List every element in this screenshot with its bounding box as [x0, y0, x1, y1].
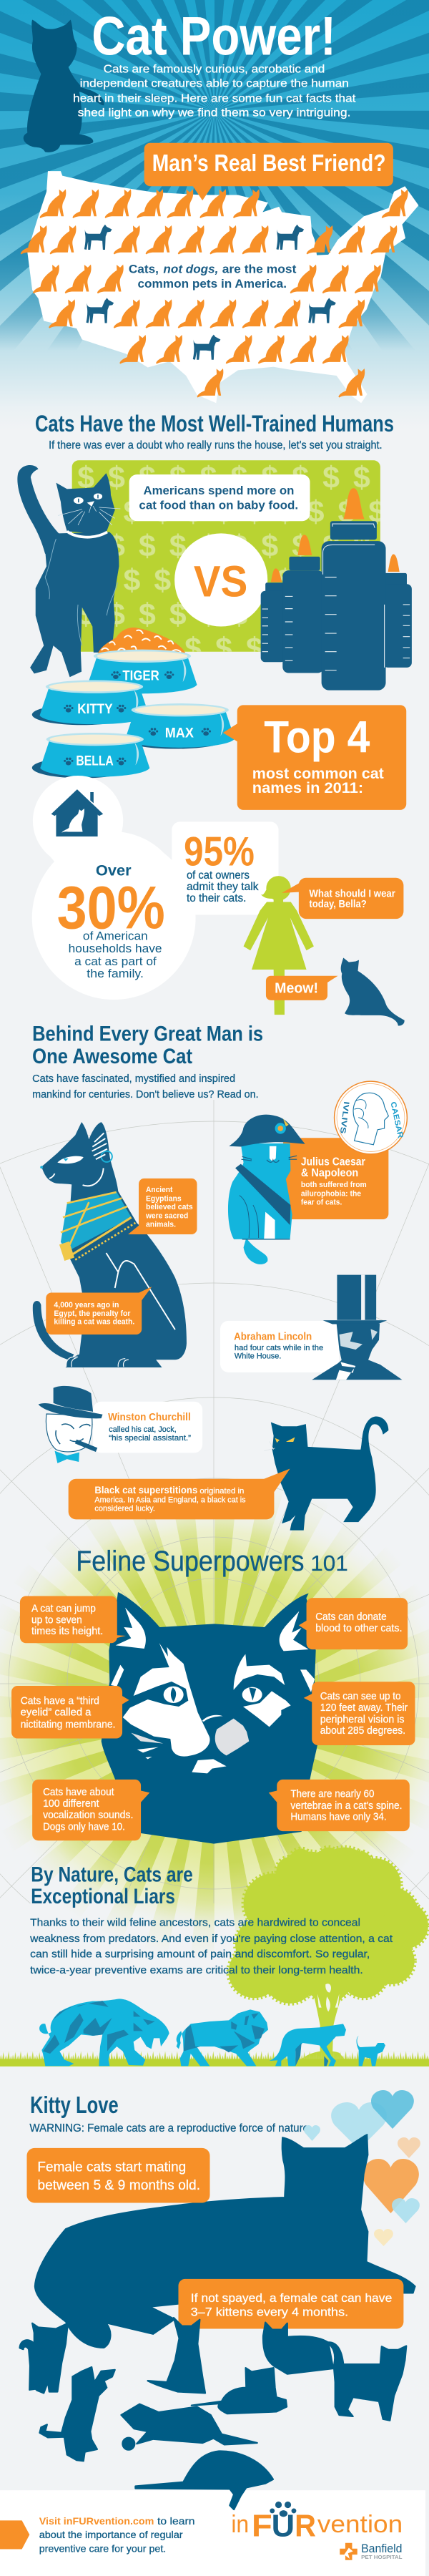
illustration: small house cat	[357, 2036, 385, 2066]
logo: inFURvention: vention	[317, 2511, 403, 2538]
detail: Egyptian cat paws	[66, 1357, 129, 1367]
callout: Abraham Lincoln: had four cats while in the	[235, 1344, 323, 1352]
illustration: saber-toothed cat	[39, 1999, 169, 2066]
callout: black cat superstitions	[69, 1469, 290, 1519]
callout: Winston Churchill	[93, 1402, 202, 1453]
icon: orange heart	[363, 2159, 419, 2213]
callout: 100 vocalization sounds: Cats have about	[43, 1787, 114, 1798]
illustration: baby bottles	[261, 488, 412, 691]
heading: great men	[32, 1022, 263, 1068]
callout: third eyelid: Cats have a “third	[21, 1696, 99, 1707]
map of the USA	[27, 171, 418, 403]
stat: 95 percent caption: admit they talk	[187, 881, 259, 893]
callout: 100 vocalization sounds: 100 different	[43, 1798, 99, 1810]
text: exceptional liars paragraph: Thanks to their wild feline ancestors, cats are hardwired to conceal	[30, 1917, 360, 1929]
bowl: tiger: TIGER	[122, 669, 159, 684]
VS badge	[174, 533, 267, 627]
callout: 4,000 years ago: Egypt, the penalty for	[54, 1309, 131, 1318]
illustration: lion	[177, 2009, 268, 2066]
grass strip	[0, 2051, 429, 2067]
stat: over 30 percent: Over	[96, 862, 132, 879]
callout: Winston Churchill: Winston Churchill	[108, 1412, 191, 1423]
heading: great men: Behind Every Great Man is	[32, 1022, 263, 1045]
callout: third eyelid: nictitating membrane.	[21, 1719, 115, 1731]
bowl: max: MAX	[165, 726, 194, 741]
callout: start mating: Female cats start mating	[37, 2160, 186, 2175]
stat: 95 percent caption	[187, 869, 259, 904]
SECTION: big cat ancestors	[39, 1999, 385, 2066]
callout: Julius Caesar and Napoleon	[283, 1138, 388, 1219]
icon: yellow heart	[374, 2229, 393, 2246]
blue sunburst header background	[0, 0, 429, 429]
callout: black cat superstitions: considered lucky.	[94, 1504, 155, 1513]
illustration: Napoleon cat	[228, 1115, 305, 1264]
pet icons grid: cats and dogs	[21, 189, 408, 398]
callout: what should I wear: today, Bella?	[309, 899, 367, 910]
arrow: footer marker	[0, 2520, 29, 2549]
text: footer call to action: about the importance of regular	[39, 2529, 183, 2540]
stat: 95 percent caption: of cat owners	[187, 869, 250, 882]
callout: top 4 cat names	[223, 705, 406, 810]
logo: Banfield Pet Hospital: PET HOSPITAL	[361, 2554, 403, 2560]
text: exceptional liars paragraph	[29, 1917, 393, 1976]
text: footer call to action: to learn	[157, 2516, 194, 2527]
callout: jump seven times	[20, 1596, 126, 1643]
icon: small light blue heart	[304, 2125, 320, 2141]
callout: 60 vertebrae	[269, 1780, 410, 1831]
callout: 4,000 years ago	[46, 1287, 152, 1335]
callout: 95 percent background	[172, 821, 279, 914]
callout: Abraham Lincoln: White House.	[235, 1352, 281, 1361]
callout: 60 vertebrae: There are nearly 60	[290, 1789, 374, 1800]
logo: inFURvention	[231, 2502, 403, 2544]
logo: Banfield Pet Hospital: Banfield	[361, 2542, 402, 2555]
icon: house with cat	[51, 789, 103, 836]
map caption: common pets in America.	[137, 277, 287, 291]
stat: over 30 percent	[57, 862, 165, 980]
callout: start mating	[26, 2148, 209, 2202]
VS badge: VS	[194, 557, 247, 605]
illustration: cheetah	[270, 2024, 346, 2066]
callout: Winston Churchill: “his special assistant.”	[109, 1434, 191, 1443]
bowl: kitty: KITTY	[77, 702, 113, 717]
stat: over 30 percent: households have	[69, 942, 162, 955]
stat: over 30 percent: a cat as part of	[74, 955, 157, 968]
callout: see 120 feet: about 285 degrees.	[320, 1725, 405, 1737]
callout: Julius Caesar and Napoleon: & Napoleon	[301, 1167, 358, 1179]
heading: kitty love: Kitty Love	[30, 2092, 119, 2118]
callout: ancient Egyptians: Egyptians	[146, 1194, 182, 1203]
stat: 95 percent: 95%	[184, 829, 255, 875]
callout: Julius Caesar and Napoleon: Julius Caesar	[301, 1156, 365, 1169]
bowl: max	[125, 703, 235, 749]
SECTION: great men continued and superpowers	[39, 1275, 402, 1577]
stat: over 30 percent: the family.	[87, 967, 144, 980]
illustration: Egyptian cat	[33, 1122, 187, 1367]
text: exceptional liars paragraph: twice-a-year preventive exams are critical to their long-term health.	[30, 1964, 363, 1976]
text: great men intro: Cats have fascinated, mystified and inspired	[32, 1073, 235, 1085]
intro paragraph: shed light on why we find them so very intriguing.	[78, 107, 351, 119]
text: footer call to action	[39, 2516, 194, 2554]
text: footer call to action: preventive care for your pet.	[39, 2543, 166, 2554]
callout: cat food vs baby food	[129, 474, 310, 521]
callout: cat food vs baby food: Americans spend more on	[144, 484, 294, 497]
callout: black cat superstitions: originated in	[199, 1487, 244, 1496]
text: great men intro	[32, 1073, 259, 1101]
illustration: cat food pile	[98, 628, 186, 659]
callout: what should I wear	[282, 878, 403, 919]
subheading: If there was ever a doubt who really runs the house, let's set you straight.	[49, 439, 383, 452]
icon: sitting cat	[341, 958, 405, 1026]
callout: black cat superstitions: America. In Asia and England, a black cat is	[94, 1496, 246, 1505]
icon: light blue large heart	[331, 2102, 387, 2150]
polar grid and glow background for history and superpowers	[0, 1100, 429, 1949]
SECTION: superpower callouts	[11, 1596, 415, 1745]
bowl: bella	[32, 733, 149, 778]
icon: blue heart	[371, 2090, 414, 2129]
callout: jump seven times: A cat can jump	[31, 1603, 96, 1614]
SECTION: header and map	[21, 6, 418, 436]
callout: cat food vs baby food: cat food than on baby food.	[139, 499, 298, 512]
callout: see 120 feet: 120 feet away. Their	[320, 1702, 408, 1714]
callout: see 120 feet: Cats can see up to	[320, 1691, 401, 1702]
illustration: kittens	[20, 2318, 406, 2509]
logo: inFURvention: in	[231, 2511, 249, 2538]
callout: kittens every 4 months	[178, 2279, 403, 2328]
callout: Abraham Lincoln: Abraham Lincoln	[234, 1332, 312, 1343]
stat: over 30 percent: of American	[83, 930, 148, 943]
callout: 4,000 years ago: killing a cat was death.	[54, 1318, 134, 1327]
icon: peach heart	[398, 2137, 420, 2158]
icon: Caesar coin: CAESAR	[388, 1101, 405, 1139]
callout: third eyelid: eyelid” called a	[21, 1707, 92, 1719]
callout: start mating: between 5 & 9 months old.	[37, 2178, 200, 2193]
callout: ancient Egyptians: animals.	[146, 1220, 176, 1229]
icon: small blue heart	[392, 2198, 420, 2223]
callout: top 4 cat names: names in 2011:	[252, 779, 363, 796]
icon: Caesar coin: IVLIVS	[338, 1101, 350, 1134]
heading: exceptional liars	[31, 1863, 193, 1908]
callout: ancient Egyptians	[128, 1179, 197, 1234]
callout: donate blood	[299, 1598, 408, 1649]
callout: 100 vocalization sounds: Dogs only have 10.	[43, 1821, 125, 1833]
text: great men intro: mankind for centuries. Don't believe us? Read on.	[32, 1089, 259, 1101]
heading: feline superpowers: 101	[310, 1551, 348, 1576]
callout: top 4 cat names: Top 4	[264, 713, 370, 763]
stat: 95 percent caption: to their cats.	[187, 892, 246, 904]
callout: donate blood: blood to other cats.	[315, 1623, 402, 1634]
stat: over 30 percent: 30%	[57, 874, 165, 942]
illustration: woman figure	[244, 876, 314, 1015]
title: Cat Power!	[92, 6, 336, 67]
map caption: are the most	[222, 263, 297, 276]
callout: donate blood: Cats can donate	[315, 1611, 387, 1623]
text: exceptional liars paragraph: can still hide a surprising amount of pain and discomfort. So regular,	[30, 1948, 370, 1961]
icon: sitting cat silhouette	[24, 20, 104, 152]
illustration: tree	[229, 1848, 428, 2063]
callout: jump seven times: up to seven	[31, 1614, 82, 1626]
callout: Julius Caesar and Napoleon: fear of cats.	[301, 1198, 342, 1206]
illustration: standing cat	[17, 465, 120, 677]
illustration: black cat	[264, 1417, 388, 1531]
SECTION: well-trained humans	[17, 439, 412, 1000]
SECTION: exceptional liars	[0, 1780, 429, 2135]
text: exceptional liars paragraph: weakness from predators. And even if you're paying close attention, a cat	[29, 1933, 393, 1945]
SECTION: kitty love and footer	[0, 2135, 425, 2576]
callout: man's real best friend	[144, 143, 393, 200]
text: footer call to action: Visit inFURvention.com	[39, 2516, 154, 2527]
logo: Banfield Pet Hospital	[340, 2542, 403, 2560]
callout: 60 vertebrae: vertebrae in a cat's spine.	[290, 1800, 402, 1812]
callout: Abraham Lincoln	[220, 1321, 339, 1372]
panel: 30 percent circle background	[32, 776, 196, 1000]
callout: Julius Caesar and Napoleon: both suffered from	[301, 1181, 367, 1189]
panel: footer background	[0, 2490, 425, 2576]
callout: man's real best friend: Man’s Real Best Friend?	[152, 150, 386, 177]
bowl: bella: BELLA	[76, 754, 114, 769]
logo: inFURvention: F	[252, 2509, 272, 2544]
callout: third eyelid	[11, 1686, 129, 1738]
callout: 60 vertebrae: Humans have only 34.	[290, 1811, 387, 1823]
illustration: cat face	[102, 1592, 318, 1844]
intro paragraph: Cats are famously curious, acrobatic and	[104, 62, 325, 75]
callout: ancient Egyptians: believed cats	[146, 1203, 193, 1211]
callout: 100 vocalization sounds	[32, 1780, 149, 1840]
callout: Julius Caesar and Napoleon: ailurophobia: the	[301, 1189, 361, 1198]
callout: ancient Egyptians: Ancient	[146, 1186, 173, 1194]
illustration: mother cat	[35, 2135, 415, 2348]
callout: see 120 feet	[304, 1682, 415, 1745]
callout: top 4 cat names: most common cat	[252, 765, 384, 782]
heading: exceptional liars: Exceptional Liars	[31, 1885, 175, 1908]
callout: jump seven times: times its height.	[31, 1626, 103, 1637]
heading: feline superpowers: Feline Superpowers	[76, 1545, 305, 1577]
map caption: Cats,	[129, 263, 159, 276]
icon: Caesar coin	[335, 1081, 407, 1154]
logo: inFURvention: U	[272, 2509, 295, 2544]
bowl: tiger	[87, 650, 197, 693]
text: warning: WARNING: Female cats are a reproductive force of nature.	[29, 2122, 312, 2135]
callout: kittens every 4 months: 3–7 kittens every 4 months.	[191, 2305, 348, 2318]
callout: see 120 feet: peripheral vision is	[320, 1714, 405, 1726]
SECTION: household stats and great men	[32, 862, 407, 1367]
intro paragraph: independent creatures able to capture the human	[80, 77, 349, 90]
callout: Winston Churchill: called his cat, Jock,	[109, 1425, 177, 1434]
callout: black cat superstitions: Black cat superstitions	[94, 1485, 198, 1496]
callout: meow	[266, 976, 338, 1000]
intro paragraph	[73, 62, 356, 119]
callout: kittens every 4 months: If not spayed, a female cat can have	[191, 2291, 392, 2305]
map caption: not dogs,	[163, 263, 218, 276]
logo: inFURvention: R	[295, 2509, 316, 2544]
SECTION: hearts	[304, 2090, 420, 2246]
illustration: Abraham Lincoln	[312, 1275, 402, 1380]
map caption	[129, 263, 297, 291]
intro paragraph: heart in their sleep. Here are some fun cat facts that	[73, 92, 356, 104]
heading: exceptional liars: By Nature, Cats are	[31, 1863, 193, 1887]
illustration: Winston Churchill	[39, 1386, 102, 1463]
callout: ancient Egyptians: were sacred	[145, 1211, 188, 1220]
callout: 4,000 years ago: 4,000 years ago in	[54, 1301, 119, 1309]
callout: meow: Meow!	[275, 980, 318, 996]
bowl: kitty	[32, 680, 149, 725]
panel: green money background	[72, 460, 380, 652]
callout: what should I wear: What should I wear	[309, 889, 395, 900]
callout: 100 vocalization sounds: vocalization sounds.	[43, 1810, 133, 1821]
heading: great men: One Awesome Cat	[32, 1045, 192, 1068]
